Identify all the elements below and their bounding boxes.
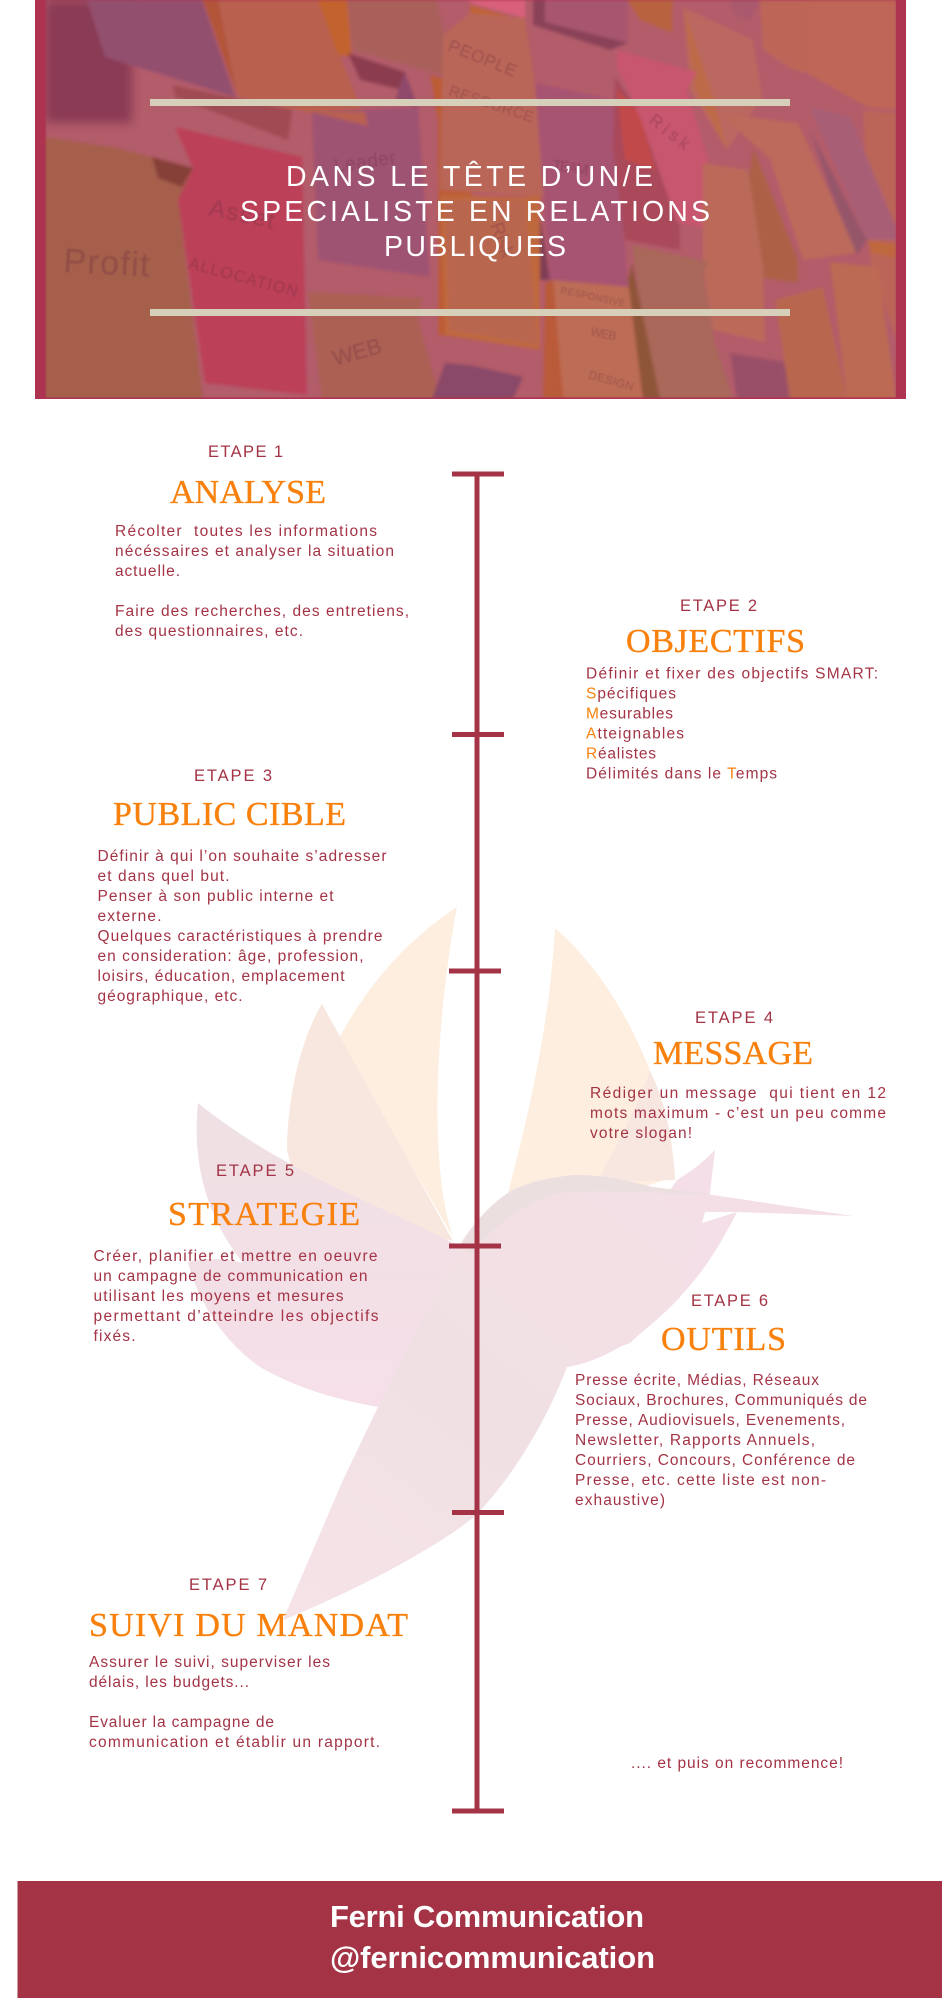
step 6 heading: OUTILS [661, 1321, 786, 1358]
step 2 body: Définir et fixer des objectifs SMART: [586, 666, 878, 682]
step 2 body: Réalistes [586, 746, 656, 762]
step 6 body: Presse, Audiovisuels, Evenements, [575, 1412, 845, 1429]
step 3 body: Penser à son public interne et [98, 888, 334, 905]
photo handwriting: Profit [63, 242, 151, 285]
photo handwriting: PEOPLE [446, 36, 519, 81]
title [240, 161, 710, 263]
step 3 [98, 767, 386, 1005]
step 6 body: exhaustive) [575, 1492, 665, 1509]
photo handwriting: RESOURCE [447, 83, 536, 126]
step 1 body: actuelle. [115, 563, 180, 580]
step 7 body: Assurer le suivi, superviser les [89, 1654, 330, 1671]
step 5 body: fixés. [94, 1328, 136, 1345]
step 7 label: ETAPE 7 [189, 1576, 267, 1594]
step 5 label: ETAPE 5 [216, 1162, 294, 1180]
step 1 body: Faire des recherches, des entretiens, [115, 603, 409, 620]
photo handwriting: Risk [646, 110, 694, 154]
photo handwriting: TEAM [551, 157, 589, 179]
photo handwriting: WEB [329, 333, 384, 371]
photo handwriting: Leader [333, 147, 398, 177]
step 2 body: Mesurables [586, 706, 673, 722]
timeline [449, 472, 504, 1814]
step 6 label: ETAPE 6 [691, 1292, 768, 1310]
header frame [35, 0, 906, 399]
step 7 body [89, 1654, 380, 1751]
step 2 [586, 597, 878, 782]
closing note: .... et puis on recommence! [631, 1755, 843, 1772]
top rule [150, 99, 790, 106]
step 1 body: des questionnaires, etc. [115, 623, 303, 640]
step 1 label: ETAPE 1 [208, 443, 283, 461]
step 6 body: Presse écrite, Médias, Réseaux [575, 1372, 819, 1389]
hummingbird watermark [188, 907, 853, 1620]
step 7 body: délais, les budgets... [89, 1674, 249, 1691]
footer text: Ferni Communication [330, 1899, 644, 1934]
step 1 [115, 443, 409, 640]
footer band [18, 1881, 942, 1998]
photo handwriting [63, 36, 694, 394]
step 3 heading: PUBLIC CIBLE [113, 796, 346, 833]
photo handwriting: RESPONSIVE [559, 285, 626, 310]
step 5 body: permettant d’atteindre les objectifs [94, 1308, 379, 1325]
step 5 heading: STRATEGIE [168, 1196, 360, 1233]
step 4 body: mots maximum - c’est un peu comme [590, 1105, 886, 1122]
step 3 body: en consideration: âge, profession, [98, 948, 364, 965]
step 3 body: géographique, etc. [98, 988, 242, 1005]
step 3 label: ETAPE 3 [194, 767, 272, 785]
step 6 body [575, 1372, 867, 1509]
step 4 body: Rédiger un message qui tient en 12 [590, 1085, 886, 1102]
step 2 body: Atteignables [586, 726, 684, 742]
sticky notes photo [45, 0, 897, 399]
step 3 body: loisirs, éducation, emplacement [98, 968, 345, 985]
step 5 [94, 1162, 379, 1345]
step 5 body [94, 1248, 379, 1345]
header panel [35, 0, 906, 399]
step 1 body [115, 523, 409, 640]
photo handwriting: DESIGN [587, 369, 635, 394]
step 4 [590, 1009, 886, 1142]
step 2 body [586, 666, 878, 782]
step 7 heading: SUIVI DU MANDAT [89, 1607, 408, 1644]
step 7 body: Evaluer la campagne de [89, 1714, 274, 1731]
step 1 body: Récolter toutes les informations [115, 523, 377, 540]
step 6 body: Sociaux, Brochures, Communiqués de [575, 1392, 867, 1409]
title: DANS LE TÊTE D’UN/E [286, 161, 653, 193]
step 3 body: et dans quel but. [98, 868, 230, 885]
step 5 body: utilisant les moyens et mesures [94, 1288, 344, 1305]
footer text [330, 1899, 655, 1975]
step 5 body: un campagne de communication en [94, 1268, 368, 1285]
step 4 body: votre slogan! [590, 1125, 692, 1142]
photo handwriting: ALLOCATION [187, 255, 300, 301]
step 1 body: nécéssaires et analyser la situation [115, 543, 394, 560]
step 2 body: Délimités dans le Temps [586, 766, 777, 782]
step 6 body: Presse, etc. cette liste est non- [575, 1472, 826, 1489]
step 6 body: Newsletter, Rapports Annuels, [575, 1432, 815, 1449]
step 6 body: Courriers, Concours, Conférence de [575, 1452, 855, 1469]
step 2 label: ETAPE 2 [680, 597, 757, 615]
step 5 body: Créer, planifier et mettre en oeuvre [94, 1248, 378, 1265]
step 2 body: Spécifiques [586, 686, 676, 702]
photo handwriting: WEB [589, 324, 618, 343]
step 3 body: externe. [98, 908, 162, 925]
photo handwriting: Asset [207, 194, 277, 235]
bottom rule [150, 309, 790, 316]
photo handwriting: Risk [485, 220, 518, 261]
title: PUBLIQUES [384, 231, 566, 263]
step 3 body [98, 848, 386, 1005]
step 1 heading: ANALYSE [170, 474, 326, 511]
step 7 [89, 1576, 408, 1751]
footer text: @fernicommunication [330, 1940, 655, 1975]
step 4 label: ETAPE 4 [695, 1009, 773, 1027]
title: SPECIALISTE EN RELATIONS [240, 196, 710, 228]
step 6 [575, 1292, 867, 1509]
step 3 body: Définir à qui l’on souhaite s’adresser [98, 848, 386, 865]
step 7 body: communication et établir un rapport. [89, 1734, 380, 1751]
step 4 body [590, 1085, 886, 1142]
step 2 heading: OBJECTIFS [626, 623, 805, 660]
step 4 heading: MESSAGE [653, 1035, 813, 1072]
step 3 body: Quelques caractéristiques à prendre [98, 928, 382, 945]
